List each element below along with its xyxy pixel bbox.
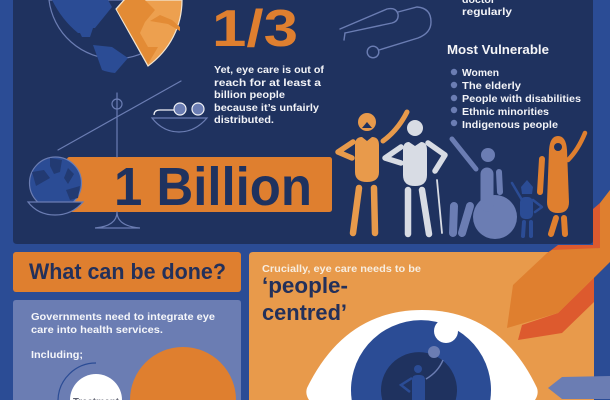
text block: unfair distribution	[214, 64, 325, 126]
list: vulnerable groups: The elderly	[462, 80, 521, 92]
panel: people-centred care	[249, 252, 594, 400]
text block: see doctor regularly	[462, 0, 512, 18]
heading: people-centred: centred’	[262, 300, 347, 325]
banner: 1 billion: 1 Billion	[114, 157, 312, 217]
figure: wheelchair user	[452, 139, 517, 239]
text block: unfair distribution: reach for at least a	[214, 77, 321, 89]
panel: government action	[13, 300, 241, 400]
text block: unfair distribution: billion people	[214, 89, 285, 101]
list: vulnerable groups: Indigenous people	[462, 119, 558, 131]
figure: woman with hood	[540, 133, 585, 234]
list: vulnerable groups	[451, 67, 581, 131]
text block: unfair distribution: Yet, eye care is out of	[214, 64, 325, 76]
banner: what can be done	[13, 252, 241, 292]
figure: elderly man with cane	[385, 120, 445, 234]
icon: eye	[306, 310, 538, 400]
text block: unfair distribution: distributed.	[214, 114, 274, 126]
illustration: vulnerable people	[338, 112, 585, 239]
list: vulnerable groups: Women	[462, 67, 499, 79]
text block: integrate eye care	[31, 311, 215, 361]
chart: treatment circle	[58, 363, 122, 400]
text block: integrate eye care: care into health services.	[31, 324, 163, 336]
text block: see doctor regularly: regularly	[462, 6, 512, 18]
chart: orange circle	[130, 347, 236, 400]
arrow: blue pointer	[548, 376, 610, 399]
figure: child	[512, 180, 542, 236]
icon: stethoscope	[340, 7, 431, 58]
text block: integrate eye care: Including;	[31, 349, 83, 361]
panel: global eye care inequality	[13, 0, 593, 244]
arrow: decorative orange ribbon	[507, 190, 610, 340]
heading: most vulnerable: Most Vulnerable	[447, 43, 549, 57]
banner: what can be done: What can be done?	[29, 259, 226, 284]
list: vulnerable groups: Ethnic minorities	[462, 106, 549, 118]
icon: globe with one third highlighted	[49, 0, 182, 73]
heading: people-centred: ‘people-	[262, 273, 348, 298]
icon: small globe on scale pan	[28, 157, 83, 215]
text block: unfair distribution: because it’s unfairly	[214, 102, 319, 114]
stat: one third: 1/3	[212, 0, 298, 58]
icon: scales	[58, 81, 181, 228]
heading: people-centred	[262, 273, 348, 325]
icon: glasses on scale pan	[152, 103, 207, 132]
text block: integrate eye care: Governments need to integrate eye	[31, 311, 215, 323]
text: crucially: Crucially, eye care needs to be	[262, 263, 421, 275]
figure: man with turban	[338, 112, 407, 233]
list: vulnerable groups: People with disabilities	[462, 93, 581, 105]
